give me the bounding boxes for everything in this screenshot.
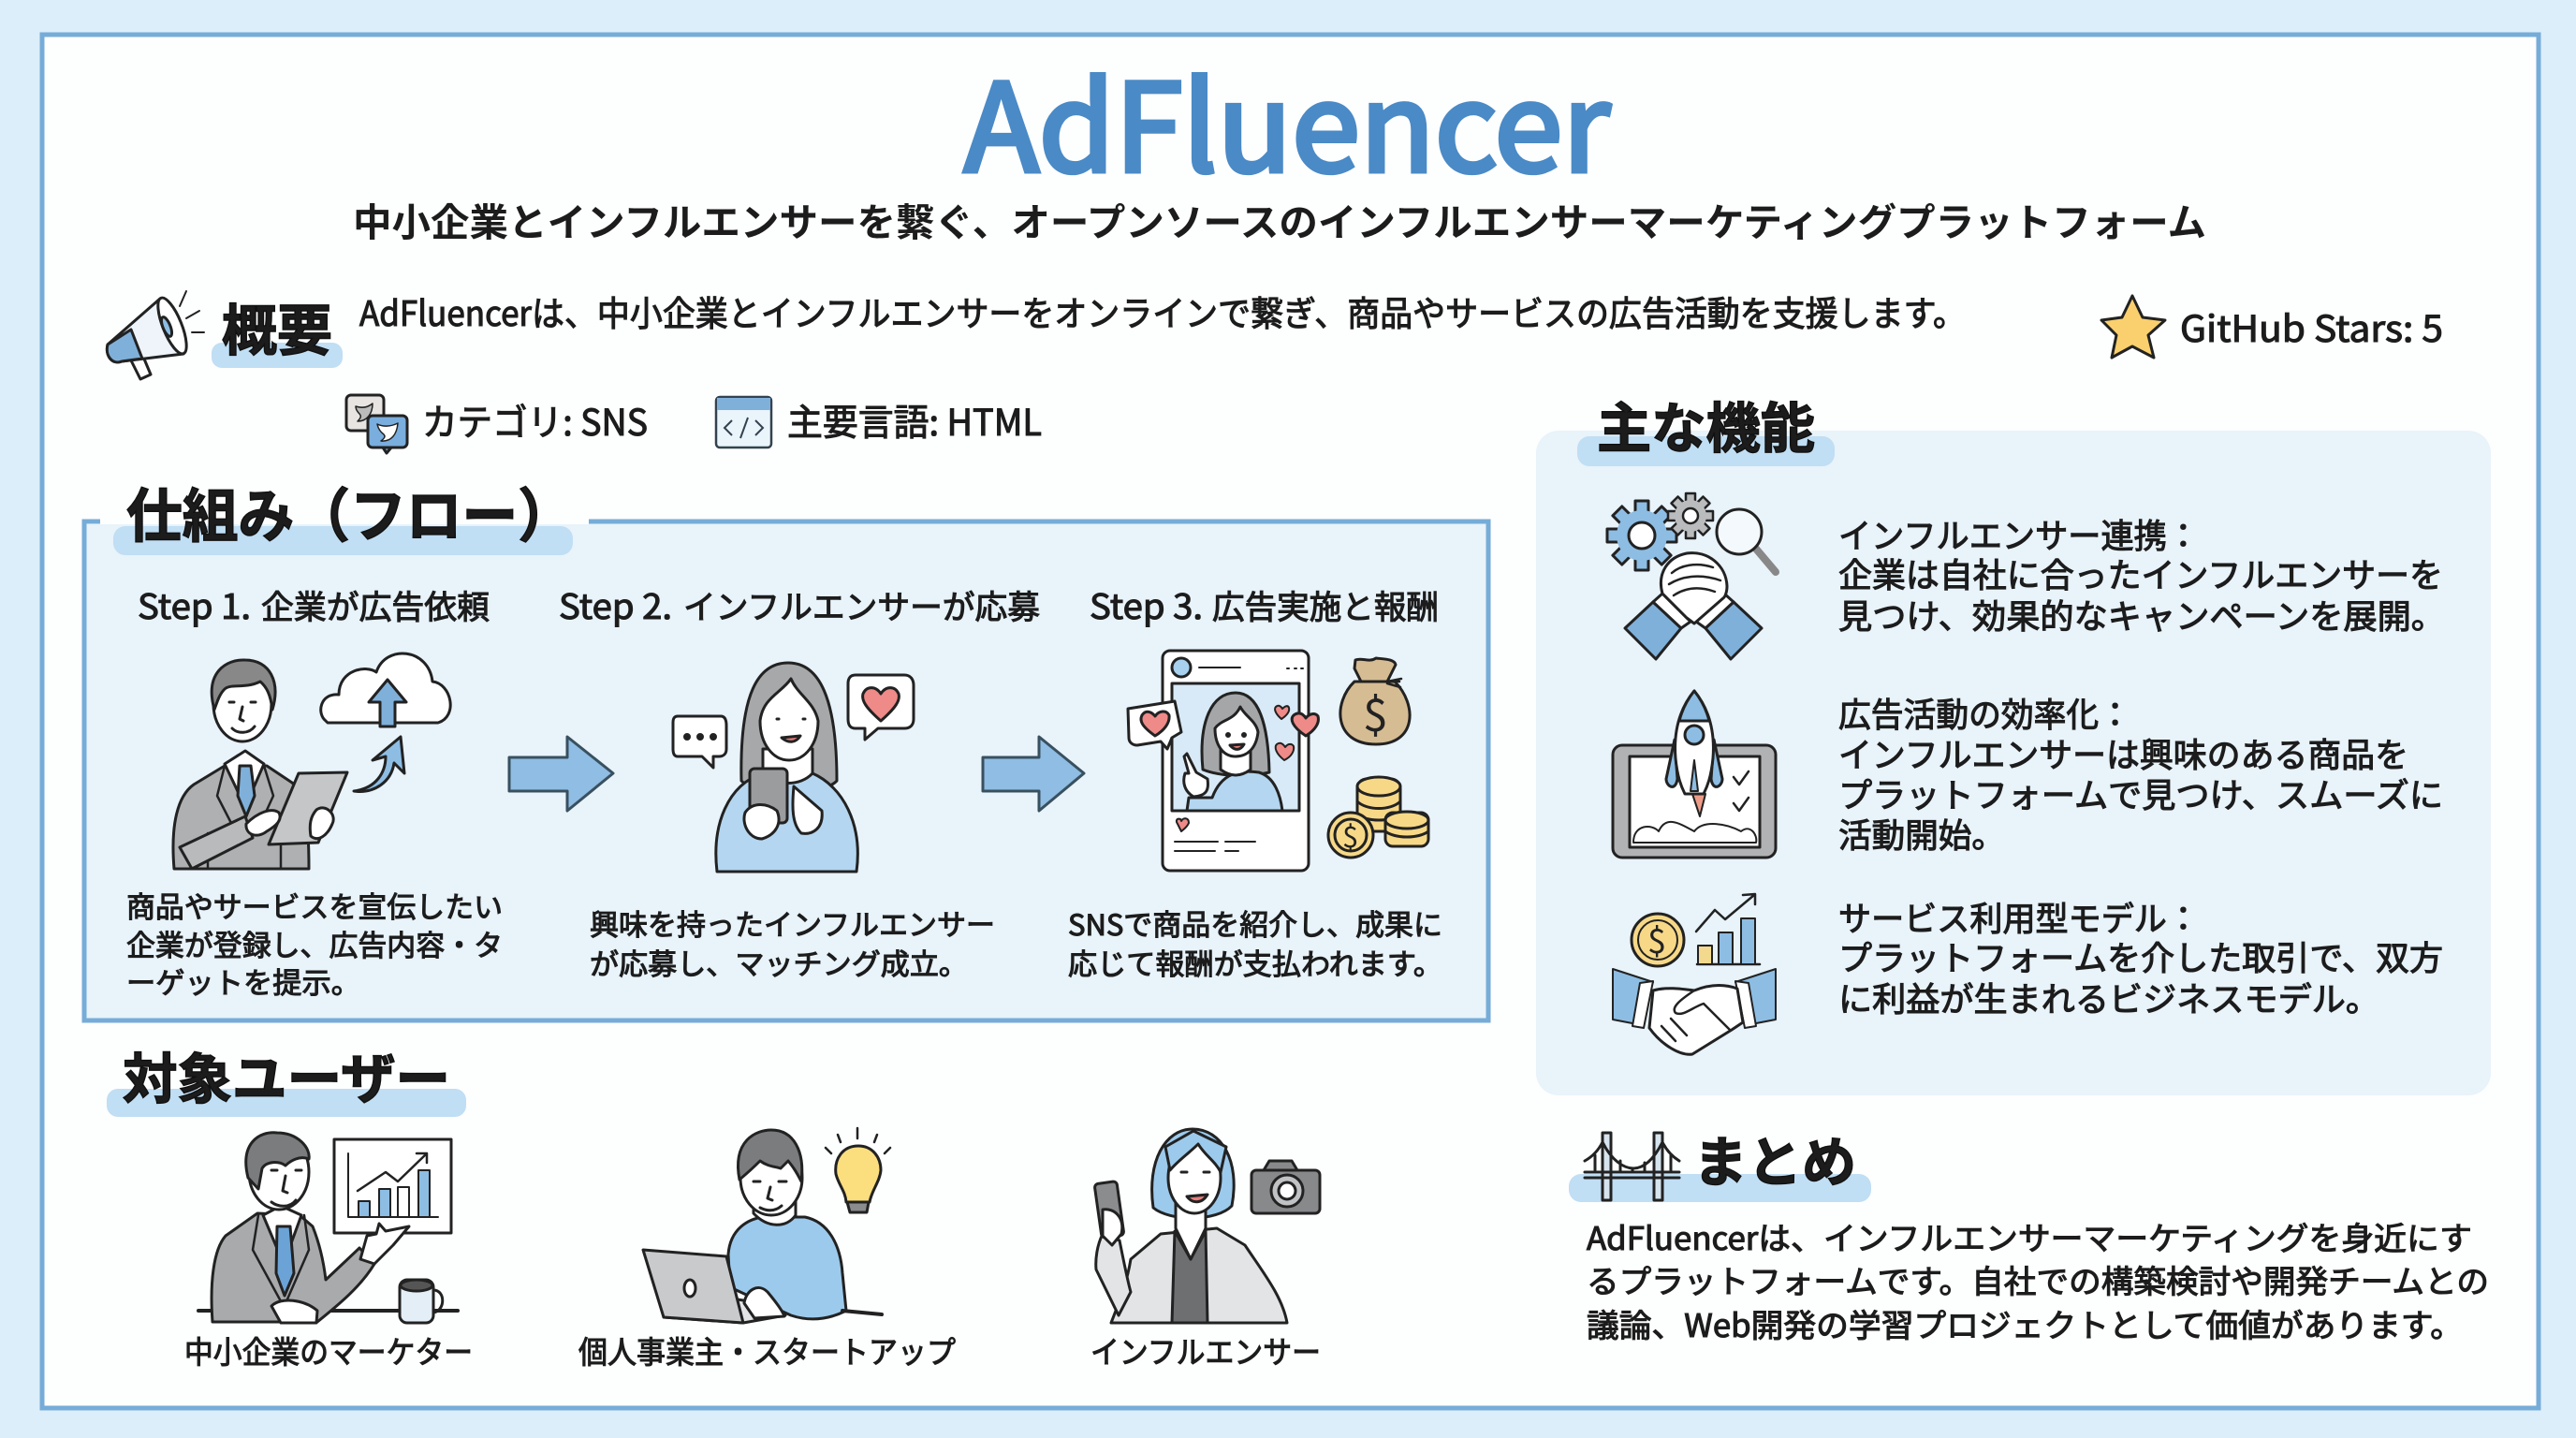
icon: coin, chart and handshake [1613, 894, 1776, 1054]
feature 3 text [1838, 892, 2443, 1021]
step 2 description: が応募し、マッチング成立。 [590, 941, 968, 983]
feature 2 text: インフルエンサーは興味のある商品を [1838, 728, 2408, 777]
step 3 description: SNSで商品を紹介し、成果に [1068, 902, 1442, 944]
icon: social post with money: $ [1363, 679, 1388, 744]
icon: marketer with chart [198, 1133, 458, 1323]
step 2 description [590, 902, 995, 983]
feature 3 text: プラットフォームを介した取引で、双方 [1838, 932, 2443, 980]
arrow 2 [983, 737, 1084, 811]
icon: social post with money: $ [1342, 814, 1358, 856]
summary text: 議論、Web開発の学習プロジェクトとして価値があります。 [1587, 1300, 2463, 1346]
icon: code window [716, 397, 771, 448]
label: marketers: 中小企業のマーケター [184, 1328, 473, 1372]
summary highlight [1569, 1174, 1871, 1202]
icon: rocket and tablet [1613, 691, 1776, 858]
step 1 title: Step 1. [138, 579, 251, 629]
step 3 title: Step 3. [1090, 579, 1203, 629]
summary text: るプラットフォームです。自社での構築検討や開発チームとの [1587, 1256, 2489, 1302]
icon: woman with phone and speech bubbles [673, 663, 914, 872]
feature 2 text: プラットフォームで見つけ、スムーズに [1838, 769, 2443, 817]
summary heading: まとめ [1693, 1119, 1856, 1197]
step 3 description [1068, 902, 1442, 983]
icon: coin, chart and handshake: $ [1647, 915, 1666, 963]
step 2 title: インフルエンサーが応募 [683, 581, 1040, 629]
features heading: 主な機能 [1597, 385, 1815, 463]
step 3 description: 応じて報酬が支払われます。 [1068, 941, 1442, 983]
step 2 description: 興味を持ったインフルエンサー [590, 902, 995, 944]
feature 1 text [1838, 509, 2445, 638]
feature 3 text: に利益が生まれるビジネスモデル。 [1838, 973, 2379, 1021]
step 3 title [1090, 579, 1439, 629]
step 1 description: ーゲットを提示。 [126, 960, 360, 1002]
summary text: AdFluencerは、インフルエンサーマーケティングを身近にす [1587, 1213, 2472, 1259]
feature 2 text: 広告活動の効率化： [1838, 688, 2131, 737]
summary text [1587, 1213, 2489, 1346]
icon: gears and clasped hands [1607, 493, 1776, 659]
flow heading: 仕組み（フロー） [126, 469, 574, 553]
icon: megaphone [107, 291, 204, 379]
title: AdFluencer [964, 31, 1611, 207]
icon: influencer with camera [1094, 1129, 1320, 1323]
label: founders: 個人事業主・スタートアップ [578, 1328, 956, 1372]
step 1 title: 企業が広告依頼 [261, 581, 490, 629]
step 2 title [559, 579, 1040, 629]
label: influencers: インフルエンサー [1090, 1328, 1321, 1372]
panel: flow [82, 506, 1488, 1020]
step 1 description [126, 884, 503, 1002]
language: 主要言語: HTML [787, 394, 1042, 447]
step 1 description: 商品やサービスを宣伝したい [126, 884, 503, 926]
overview text: AdFluencerは、中小企業とインフルエンサーをオンラインで繋ぎ、商品やサービスの広告活動を支援します。 [359, 286, 1966, 336]
feature 1 text: インフルエンサー連携： [1838, 509, 2200, 558]
panel: features [1536, 431, 2491, 1095]
arrow 1 [509, 737, 613, 811]
step 2 title: Step 2. [559, 579, 672, 629]
feature 1 text: 見つけ、効果的なキャンペーンを展開。 [1838, 590, 2445, 638]
GitHub stars: GitHub Stars: 5 [2180, 301, 2443, 353]
feature 2 text: 活動開始。 [1838, 809, 2005, 858]
target users heading: 対象ユーザー [123, 1035, 450, 1114]
icon: social post with money [1128, 651, 1428, 871]
subtitle: 中小企業とインフルエンサーを繋ぐ、オープンソースのインフルエンサーマーケティングプラットフォーム [353, 191, 2206, 247]
feature 3 text: サービス利用型モデル： [1838, 892, 2200, 941]
icon: bridge [1585, 1133, 1679, 1200]
feature 2 text [1838, 688, 2443, 858]
step 3 title: 広告実施と報酬 [1212, 581, 1439, 629]
icon: solo founder with laptop [643, 1128, 890, 1323]
feature 1 text: 企業は自社に合ったインフルエンサーを [1838, 549, 2443, 597]
icon: sns [346, 395, 407, 453]
step 1 title [138, 579, 490, 629]
overview heading: 概要 [222, 286, 332, 366]
category: カテゴリ: SNS [422, 394, 648, 447]
step 1 description: 企業が登録し、広告内容・タ [126, 922, 503, 964]
icon: star [2101, 296, 2165, 358]
icon: businessman with tablet and cloud [173, 653, 450, 869]
